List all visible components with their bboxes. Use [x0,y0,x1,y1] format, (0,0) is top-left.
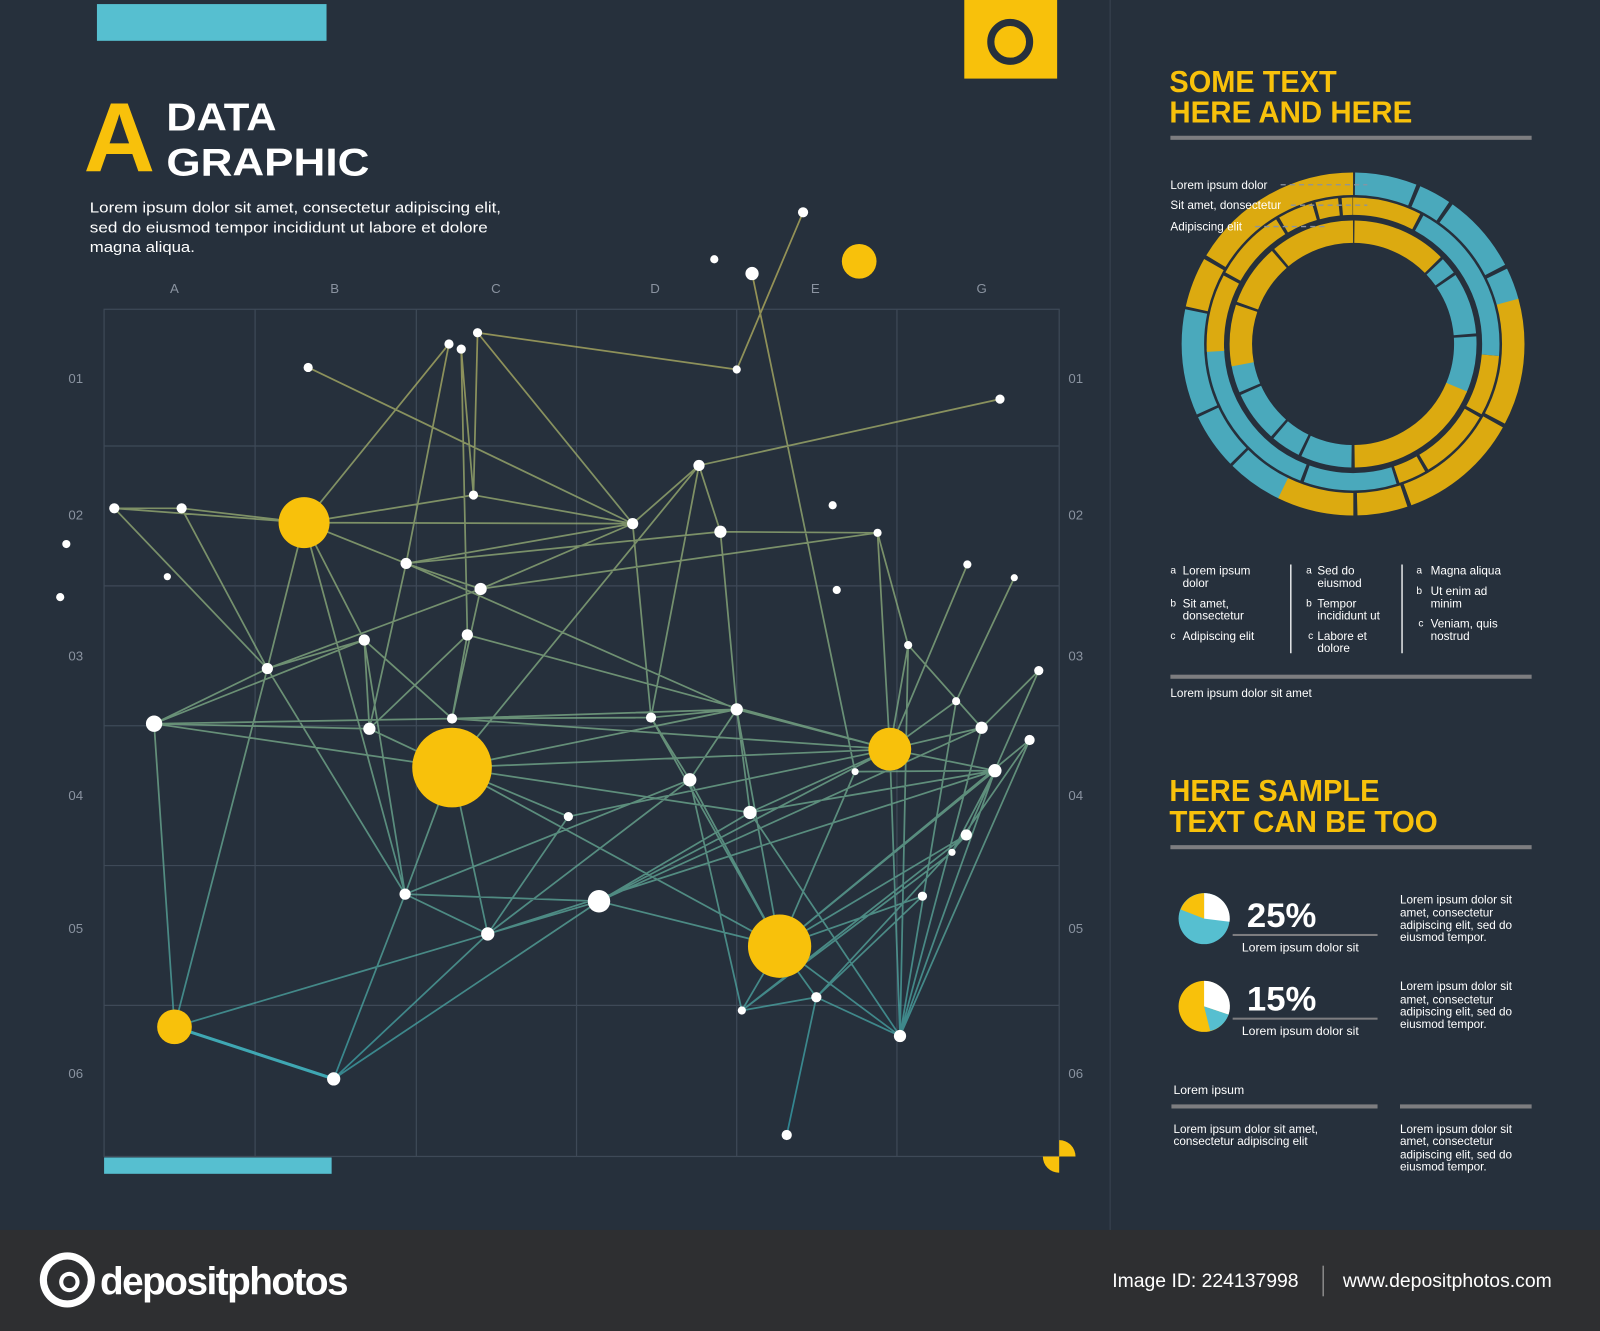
title: GRAPHIC [166,142,369,185]
heading: here sample text [1169,774,1438,839]
grid column labels: G [976,281,987,296]
stat 25% description [1400,893,1513,944]
stat 25% description: eiusmod tempor. [1400,931,1487,944]
stat 25%: Lorem ipsum dolor sit [1242,940,1359,954]
legend: b [1416,586,1422,597]
legend: Sit amet, [1183,597,1229,610]
grid column labels: A [170,281,179,296]
title: A [84,82,155,192]
bottom notes: Lorem ipsum [1173,1083,1244,1097]
stat 15%: Lorem ipsum dolor sit [1242,1024,1359,1038]
footer band [0,1230,1600,1331]
stat 25% description: amet, consectetur [1400,907,1493,920]
legend: Tempor [1317,597,1357,610]
grid row labels: 03 [68,648,83,663]
title [84,82,369,192]
grid row labels: 06 [1068,1066,1083,1081]
grid [104,309,1059,1156]
network chart [56,207,1043,1140]
legend: Labore et [1317,630,1368,643]
legend: eiusmod [1317,577,1362,590]
donut labels: Sit amet, donsectetur [1170,199,1281,212]
legend: incididunt ut [1317,610,1381,623]
bottom notes: eiusmod tempor. [1400,1161,1487,1174]
bottom notes: adipiscing elit, sed do [1400,1148,1513,1162]
grid column labels: B [330,281,339,296]
grid row labels: 04 [68,788,83,803]
intro paragraph [90,200,501,256]
grid row labels: 01 [68,371,83,386]
stat 25% [1179,893,1378,954]
footer band: depositphotos [100,1260,347,1303]
legend: Adipiscing elit [1183,630,1255,643]
legend: Lorem ipsum [1183,565,1250,578]
grid column labels: E [811,281,820,296]
stat 25%: 25% [1247,897,1316,935]
grid row labels: 02 [1068,508,1083,523]
stat 25% description: adipiscing elit, sed do [1400,919,1513,932]
heading: some text here and here: SOME TEXT [1169,65,1337,99]
stat 15% [1179,980,1378,1038]
grid row labels: 04 [1068,788,1083,803]
top cyan bar [97,4,327,41]
stat 15% description: eiusmod tempor. [1400,1018,1487,1031]
bottom cyan bar [104,1157,332,1174]
grid column labels: C [491,281,501,296]
legend: a [1170,566,1176,577]
donut labels: Adipiscing elit [1170,221,1243,234]
bottom notes: consectetur adipiscing elit [1173,1135,1308,1148]
bottom notes: amet, consectetur [1400,1135,1493,1148]
donut labels: Lorem ipsum dolor [1170,179,1268,192]
legend: b [1306,598,1312,609]
grid row labels: 02 [68,508,83,523]
icon: small yellow pie [1043,1140,1076,1173]
title: DATA [166,97,277,140]
grid row labels: 01 [1068,371,1083,386]
legend: a [1306,566,1312,577]
legend: b [1170,598,1176,609]
heading: some text here and here: HERE AND HERE [1169,95,1412,129]
legend: minim [1431,597,1462,610]
legend: Veniam, quis [1431,618,1498,631]
footer band: Image ID: 224137998 [1112,1270,1299,1292]
grid row labels [68,371,1083,1081]
stat 15% description: Lorem ipsum dolor sit [1400,980,1513,993]
intro paragraph: magna aliqua. [90,240,195,256]
legend [1170,564,1501,655]
legend: donsectetur [1183,610,1244,623]
legend: c [1418,619,1423,630]
stat 15% description: amet, consectetur [1400,993,1493,1006]
legend: dolor [1183,577,1209,590]
legend: dolore [1317,642,1350,655]
intro paragraph: sed do eiusmod tempor incididunt ut labore et dolore [90,221,488,237]
stat 15%: 15% [1247,980,1316,1018]
donut labels [1170,179,1367,234]
legend: Ut enim ad [1431,585,1487,598]
legend: c [1308,631,1313,642]
grid column labels: D [650,281,660,296]
legend: nostrud [1431,630,1470,643]
stat 25% description: Lorem ipsum dolor sit [1400,893,1513,906]
intro paragraph: Lorem ipsum dolor sit amet, consectetur adipiscing elit, [90,200,501,216]
heading: here sample text: HERE SAMPLE [1169,774,1380,808]
legend caption: Lorem ipsum dolor sit amet [1170,687,1312,700]
grid row labels: 06 [68,1066,83,1081]
bottom notes: Lorem ipsum dolor sit [1400,1123,1513,1136]
legend: Sed do [1317,565,1355,578]
donut chart [1193,184,1513,504]
heading: here sample text: TEXT CAN BE TOO [1169,805,1438,839]
legend: Magna aliqua [1431,565,1501,578]
legend: c [1170,631,1176,642]
heading: some text here and here [1169,65,1412,129]
bottom notes: Lorem ipsum dolor sit amet, [1173,1123,1318,1136]
stat 15% description [1400,980,1513,1031]
grid column labels [170,281,987,296]
grid row labels: 03 [1068,648,1083,663]
legend: a [1416,566,1422,577]
grid row labels: 05 [1068,921,1083,936]
grid row labels: 05 [68,921,83,936]
stat 15% description: adipiscing elit, sed do [1400,1006,1513,1019]
icon: yellow square with ring [964,0,1057,79]
footer band: www.depositphotos.com [1342,1270,1552,1292]
bottom notes [1171,1083,1532,1174]
